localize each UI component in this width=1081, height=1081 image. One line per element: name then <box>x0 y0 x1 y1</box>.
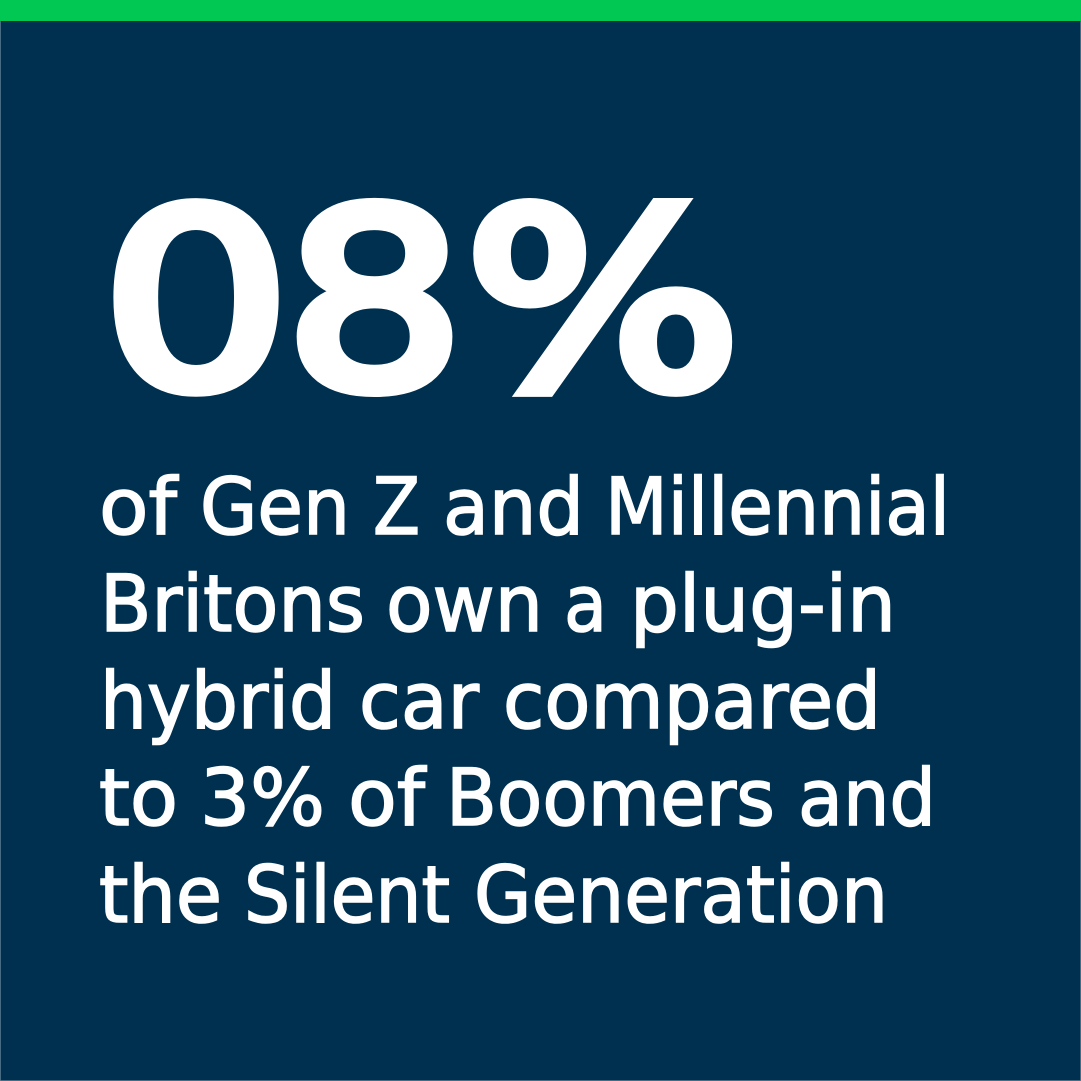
line 1: Millennial <box>605 463 950 553</box>
line 5: Generation <box>474 851 888 941</box>
top green bar <box>0 0 1081 21</box>
big statistic: 08% <box>101 159 741 446</box>
big statistic: 08%: % <box>465 159 741 446</box>
line 3: compared <box>503 657 881 747</box>
line 1: Gen <box>200 463 350 553</box>
line 3: hybrid <box>100 657 336 747</box>
line 4: Boomers <box>446 754 775 844</box>
line 5 <box>99 851 888 941</box>
line 1: Z <box>373 463 420 553</box>
line 2 <box>100 560 896 650</box>
line 2: own <box>386 560 543 650</box>
statistic description <box>99 463 950 941</box>
line 4: 3% <box>200 754 325 844</box>
line 1: and <box>443 463 584 553</box>
line 5: the <box>99 851 222 941</box>
line 1 <box>99 463 950 553</box>
line 3 <box>100 657 881 747</box>
line 1: of <box>99 463 179 553</box>
line 4: and <box>798 754 936 844</box>
line 3: car <box>359 657 480 747</box>
line 2: a <box>564 560 607 650</box>
line 2: plug-in <box>630 560 896 650</box>
line 5: Silent <box>244 851 450 941</box>
line 2: Britons <box>100 560 365 650</box>
line 4: to <box>99 754 178 844</box>
line 4: of <box>348 754 427 844</box>
line 4 <box>99 754 936 844</box>
big statistic: 08%: 8 <box>285 160 464 446</box>
big statistic: 08%: 0 <box>101 160 291 446</box>
